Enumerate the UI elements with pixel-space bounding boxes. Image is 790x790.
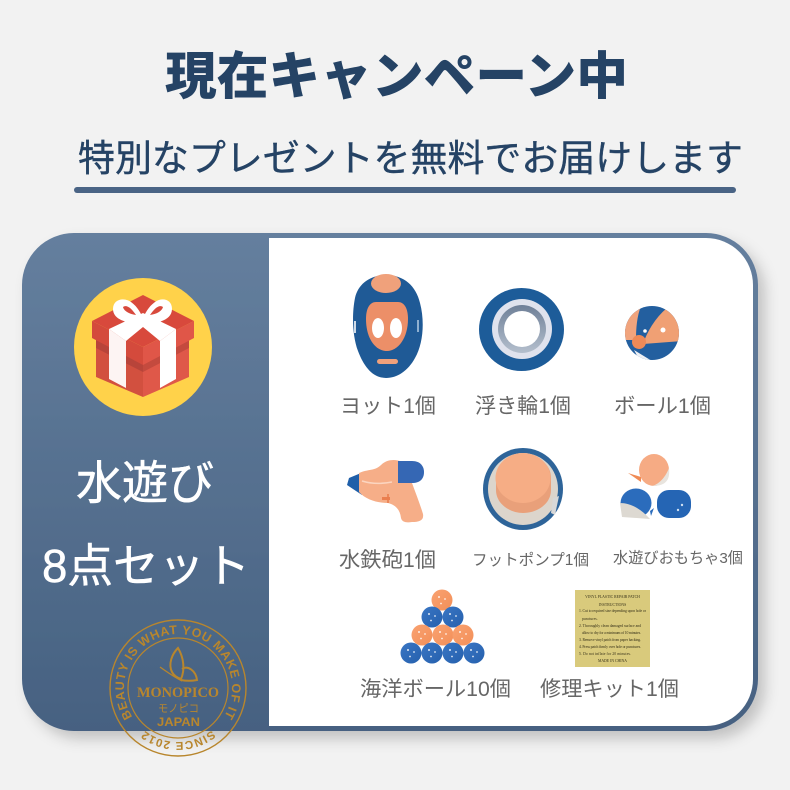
- stamp: MONOPICO logo: JAPAN: [157, 715, 200, 729]
- item: yacht float: [353, 274, 423, 378]
- panel: outer frame: [22, 233, 758, 731]
- item: repair patch: 2. Thoroughly clean damaged surface and: [579, 624, 641, 628]
- subtitle: 特別なプレゼントを無料でお届けします: [78, 138, 743, 179]
- item: repair patch: VINYL PLASTIC REPAIR PATCH: [585, 595, 640, 599]
- label: yacht: ヨット1個: [340, 395, 436, 418]
- item: repair patch: 5. Do not inflate for 20 minutes.: [579, 652, 631, 656]
- label: swim ring: 浮き輪1個: [475, 395, 571, 418]
- item: repair patch: 4. Press patch firmly over hole or punctures.: [579, 645, 641, 649]
- item: repair patch: INSTRUCTIONS: [599, 603, 626, 607]
- label: ball: ボール1個: [614, 395, 711, 418]
- subtitle underline: [74, 187, 736, 193]
- heading: water play: 水遊び: [76, 457, 214, 509]
- title: 現在キャンペーン中: [165, 48, 628, 105]
- item: repair patch: allow to dry for a minimum of 10 minutes.: [582, 631, 641, 635]
- label: water gun: 水鉄砲1個: [339, 549, 436, 572]
- item: foot pump: [483, 448, 563, 530]
- panel: white contents area: [269, 238, 753, 726]
- stamp: MONOPICO logo: モノピコ: [158, 702, 199, 715]
- icon: gift box: [74, 278, 212, 416]
- item: swim ring: [479, 288, 564, 371]
- item: water gun: [347, 460, 424, 522]
- label: foot pump: フットポンプ1個: [472, 551, 589, 569]
- item: repair patch: [575, 590, 650, 667]
- stamp: MONOPICO logo: [109, 619, 247, 757]
- stamp: MONOPICO logo: SINCE 2012: [142, 731, 215, 750]
- label: repair kit: 修理キット1個: [540, 678, 679, 701]
- stamp: MONOPICO logo: BEAUTY IS WHAT YOU MAKE OF IT: [115, 625, 241, 720]
- item: repair patch: MADE IN CHINA: [598, 659, 627, 663]
- item: water toys: [620, 454, 691, 519]
- item: ocean balls: [400, 590, 484, 664]
- stamp: MONOPICO logo: MONOPICO: [137, 685, 219, 701]
- item: repair patch: 1. Cut to required size depending upon hole or: [579, 609, 647, 613]
- item: repair patch: punctures.: [582, 617, 598, 621]
- item: beach ball: [625, 306, 679, 360]
- item: repair patch: 3. Remove vinyl patch from paper backing.: [579, 638, 641, 642]
- heading: 8 piece set: 8点セット: [42, 540, 250, 592]
- label: ocean balls: 海洋ボール10個: [360, 678, 511, 701]
- label: water toys: 水遊びおもちゃ3個: [613, 550, 743, 567]
